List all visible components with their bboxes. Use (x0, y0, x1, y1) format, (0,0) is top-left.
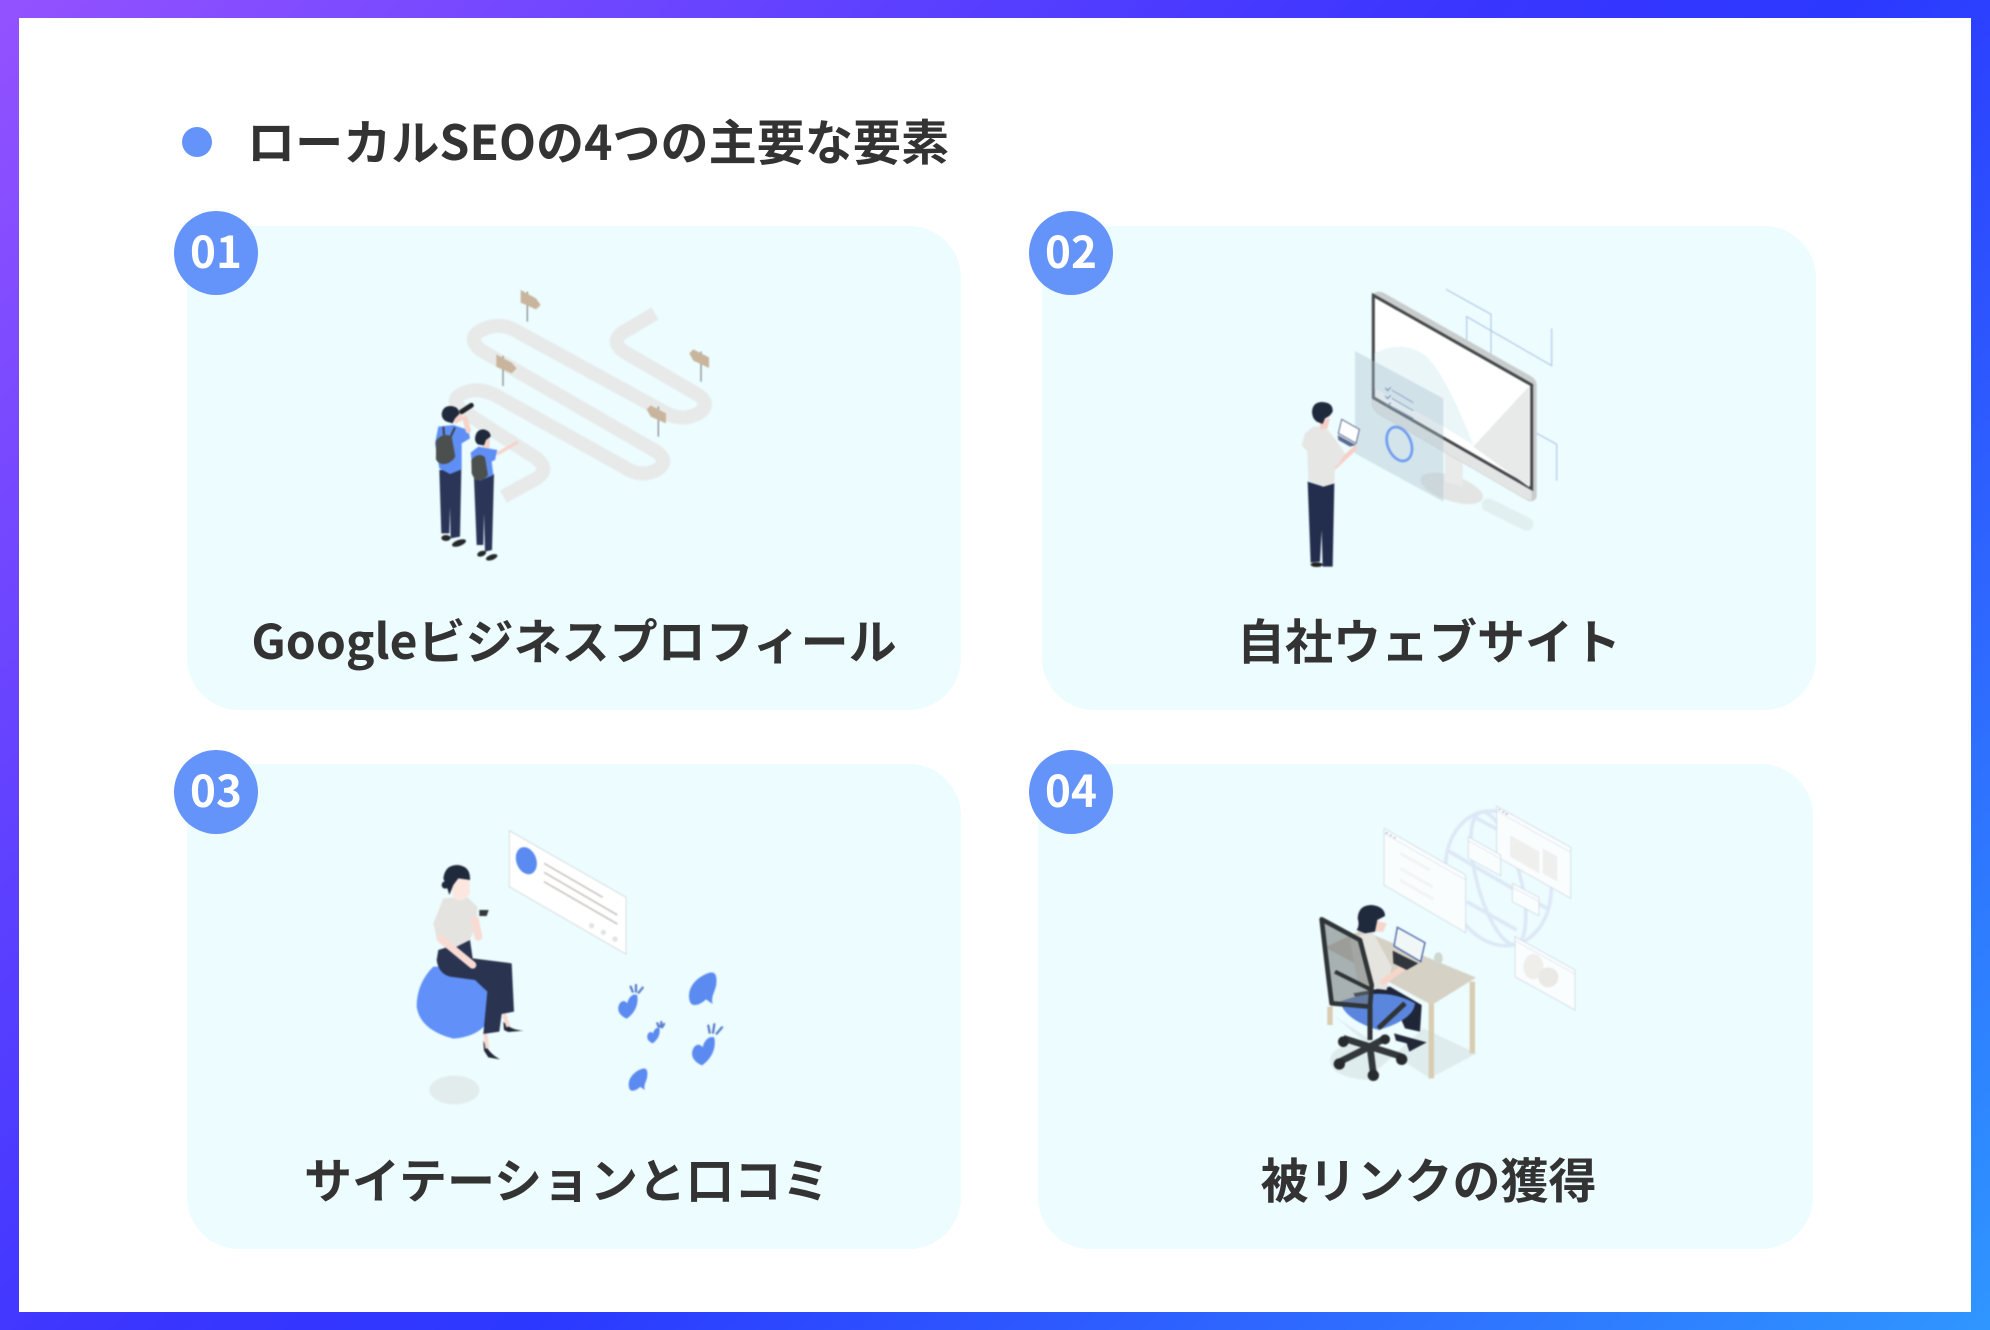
panel: citations and reviews (187, 764, 961, 1249)
speech bubbles (629, 972, 717, 1091)
badge 01 (174, 211, 258, 295)
window contents (1400, 835, 1558, 987)
badge 03: 03 (190, 756, 242, 820)
panel: own website (1042, 226, 1816, 710)
browser windows (1384, 806, 1575, 1010)
monitor stand (1417, 445, 1487, 510)
badge 03 (174, 750, 258, 834)
translucent overlay panel (1355, 351, 1443, 502)
panel: Google business profile (187, 226, 961, 710)
floor shadow (429, 1076, 479, 1104)
progress ring (1382, 423, 1417, 465)
winding road (456, 313, 705, 497)
woman (1350, 905, 1427, 1052)
hearts (618, 985, 722, 1065)
desk shadow (1488, 505, 1527, 524)
badge 01: 01 (190, 217, 242, 281)
illustration: route and hikers (434, 290, 712, 562)
desk (1325, 930, 1476, 1078)
title: ローカルSEOの4つの主要な要素 (247, 104, 949, 174)
label: 自社ウェブサイト (1237, 603, 1621, 673)
illustration: woman on ball with reviews (416, 830, 724, 1104)
panel: backlinks (1038, 764, 1813, 1249)
review card (509, 831, 626, 954)
seated woman (433, 865, 524, 1059)
badge 02: 02 (1045, 217, 1097, 281)
person with laptop (1302, 402, 1359, 567)
floor shadow (1330, 1017, 1477, 1080)
blue ball (417, 967, 490, 1039)
badge 04 (1029, 750, 1113, 834)
window title bars (1384, 809, 1575, 974)
badge 02 (1029, 211, 1113, 295)
title bullet (182, 127, 212, 157)
monitor (1372, 292, 1537, 501)
globe (1431, 799, 1566, 958)
illustration: office worker and globe (1318, 806, 1576, 1082)
circuit lines (1446, 289, 1557, 481)
hiker pointing (471, 429, 517, 562)
label: Googleビジネスプロフィール (251, 603, 897, 673)
signposts (496, 290, 709, 437)
badge 04: 04 (1045, 756, 1097, 820)
checklist (1385, 387, 1413, 418)
illustration: monitor and person (1302, 288, 1558, 568)
laptop (1393, 927, 1425, 970)
hiker with telescope (435, 405, 471, 548)
mug (1434, 952, 1443, 964)
label: サイテーションと口コミ (304, 1142, 830, 1212)
office chair (1322, 919, 1415, 1081)
label: 被リンクの獲得 (1260, 1142, 1596, 1212)
